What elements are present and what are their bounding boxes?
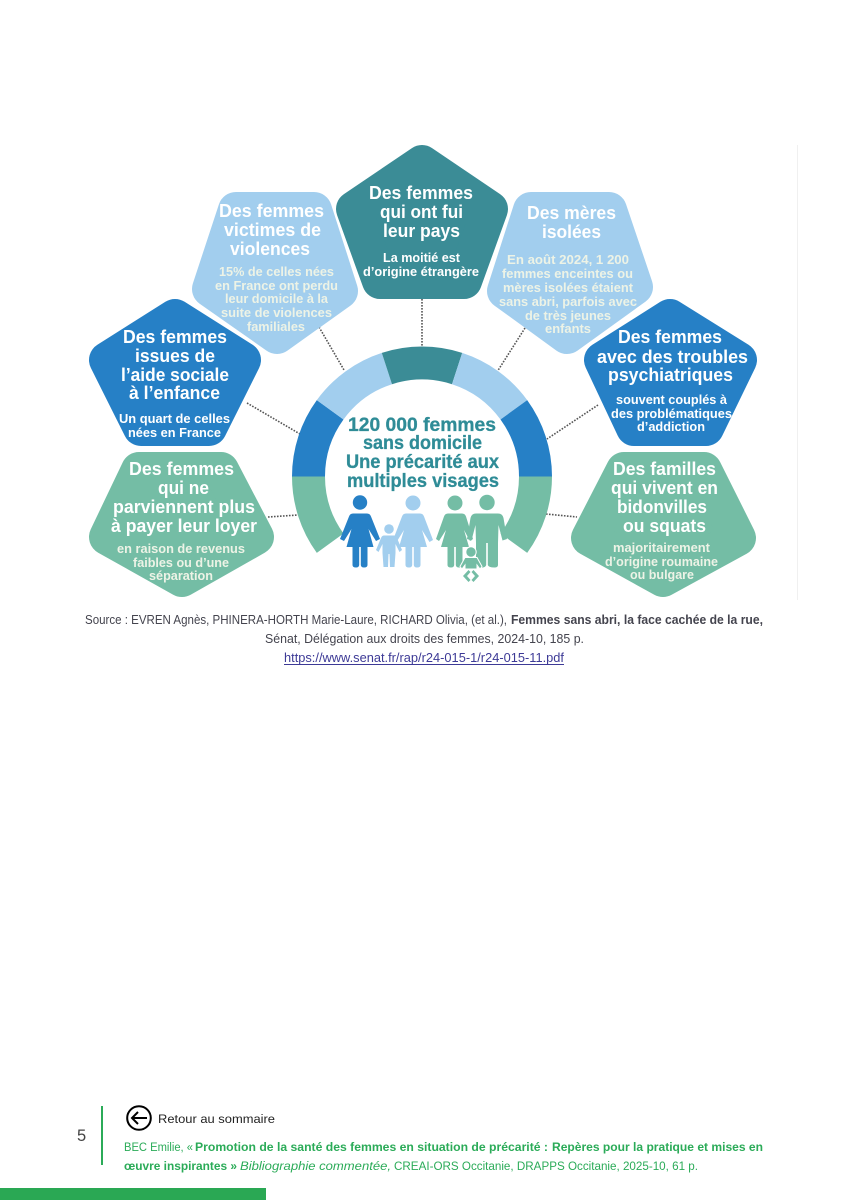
panel: femmes issues de l'aide sociale à l'enfance: Des femmes <box>123 326 227 347</box>
panel: mères isolées: femmes enceintes ou <box>502 266 633 281</box>
icon: light blue woman <box>393 496 433 568</box>
panel: mères isolées: Des mères <box>527 202 616 223</box>
panel: femmes victimes de violences: familiales <box>247 319 305 334</box>
panel: femmes qui ne parviennent plus à payer leur loyer: Des femmes <box>129 458 234 479</box>
panel: femmes victimes de violences: 15% de celles nées <box>219 264 334 279</box>
panel: femmes qui ne parviennent plus à payer leur loyer: qui ne <box>158 477 209 498</box>
icon: green man <box>467 495 507 568</box>
panel: femmes victimes de violences: en France ont perdu <box>215 278 338 293</box>
panel: femmes qui ne parviennent plus à payer leur loyer: parviennent plus <box>113 496 255 517</box>
panel: femmes avec des troubles psychiatriques: psychiatriques <box>608 364 733 385</box>
panel: familles en bidonvilles ou squats: majoritairement <box>613 540 711 555</box>
panel: femmes issues de l'aide sociale à l'enfance <box>107 317 243 440</box>
panel: femmes issues de l'aide sociale à l'enfance: l’aide sociale <box>121 364 229 385</box>
footer citation: Bibliographie commentée, <box>240 1159 391 1173</box>
icon: green woman <box>436 496 473 568</box>
panel: femmes victimes de violences: Des femmes <box>219 200 324 221</box>
panel: femmes qui ont fui leur pays <box>354 163 490 281</box>
footer citation: CREAI-ORS Occitanie, DRAPPS Occitanie, 2025-10, 61 p. <box>394 1159 698 1173</box>
panel: mères isolées <box>499 202 637 336</box>
footer citation: Repères pour la pratique et mises en <box>552 1140 763 1154</box>
central title: multiples visages <box>347 470 499 492</box>
panel: femmes issues de l'aide sociale à l'enfance: issues de <box>135 345 215 366</box>
panel: femmes avec des troubles psychiatriques <box>597 317 748 434</box>
footer green bar <box>0 1188 266 1200</box>
panel: femmes qui ne parviennent plus à payer leur loyer: en raison de revenus <box>117 541 245 556</box>
central title: sans domicile <box>363 432 482 454</box>
back to contents link: Retour au sommaire <box>158 1112 275 1126</box>
panel: femmes avec des troubles psychiatriques: des problématiques <box>611 406 732 421</box>
icon: blue woman <box>340 495 380 568</box>
panel: mères isolées: enfants <box>545 321 591 336</box>
panel: familles en bidonvilles ou squats: d’origine roumaine <box>605 554 718 569</box>
panel: familles en bidonvilles ou squats: Des familles <box>613 458 716 479</box>
panel: femmes victimes de violences: leur domicile à la <box>225 291 329 306</box>
icon: back arrow <box>127 1106 151 1130</box>
panel: familles en bidonvilles ou squats: bidonvilles <box>617 496 707 517</box>
panel: mères isolées: de très jeunes <box>525 308 611 323</box>
panel: femmes qui ont fui leur pays: d’origine étrangère <box>363 264 479 279</box>
icon: green baby <box>460 547 482 582</box>
panel: femmes avec des troubles psychiatriques: Des femmes <box>618 326 722 347</box>
panel: mères isolées: isolées <box>542 221 601 242</box>
dotted connector lines <box>247 299 598 517</box>
central segmented ring <box>292 347 552 553</box>
panel: femmes avec des troubles psychiatriques: souvent couplés à <box>616 392 728 407</box>
panel: mères isolées: sans abri, parfois avec <box>499 294 637 309</box>
central title <box>346 414 499 492</box>
central title: Une précarité aux <box>346 451 499 473</box>
footer citation: BEC Emilie, « <box>124 1140 193 1154</box>
panel: femmes qui ont fui leur pays: leur pays <box>383 220 460 241</box>
panel: familles en bidonvilles ou squats: ou bulgare <box>630 567 694 582</box>
source citation <box>85 613 763 665</box>
source citation: Source : EVREN Agnès, PHINERA-HORTH Marie-Laure, RICHARD Olivia, (et al.), <box>85 613 507 627</box>
page number: 5 <box>77 1127 86 1145</box>
panel: femmes qui ont fui leur pays: qui ont fui <box>380 201 463 222</box>
panel: femmes victimes de violences: violences <box>230 238 310 259</box>
icon: family figures <box>340 495 507 582</box>
source citation: Sénat, Délégation aux droits des femmes, 2024-10, 185 p. <box>265 632 584 646</box>
source citation: Femmes sans abri, la face cachée de la rue, <box>511 613 763 627</box>
icon: light blue child <box>376 524 402 567</box>
panel: femmes issues de l'aide sociale à l'enfance: nées en France <box>128 425 221 440</box>
panel: femmes qui ne parviennent plus à payer leur loyer: séparation <box>149 568 213 583</box>
panel: femmes avec des troubles psychiatriques: avec des troubles <box>597 346 748 367</box>
panel: mères isolées: En août 2024, 1 200 <box>507 252 629 267</box>
source citation: https://www.senat.fr/rap/r24-015-1/r24-015-11.pdf <box>284 651 565 665</box>
footer citation <box>124 1140 763 1173</box>
panel: femmes qui ne parviennent plus à payer leur loyer <box>107 458 257 583</box>
panel: femmes victimes de violences: suite de violences <box>221 305 332 320</box>
central title: 120 000 femmes <box>348 414 496 436</box>
panel: femmes qui ne parviennent plus à payer leur loyer: à payer leur loyer <box>111 515 257 536</box>
panel: femmes issues de l'aide sociale à l'enfance: Un quart de celles <box>119 411 230 426</box>
panel: femmes qui ont fui leur pays: Des femmes <box>369 182 473 203</box>
footer citation: Promotion de la santé des femmes en situation de précarité : <box>195 1140 548 1154</box>
panel: femmes victimes de violences: victimes de <box>224 219 321 240</box>
footer citation: œuvre inspirantes » <box>124 1159 237 1173</box>
panel: mères isolées: mères isolées étaient <box>503 280 634 295</box>
panel: femmes avec des troubles psychiatriques: d’addiction <box>637 419 705 434</box>
panel: femmes victimes de violences <box>210 200 340 336</box>
panel: femmes issues de l'aide sociale à l'enfance: à l’enfance <box>129 382 220 403</box>
panel: familles en bidonvilles ou squats: qui vivent en <box>611 477 718 498</box>
panel: familles en bidonvilles ou squats: ou squats <box>623 515 706 536</box>
panel: femmes qui ne parviennent plus à payer leur loyer: faibles ou d’une <box>133 555 229 570</box>
panel: femmes qui ont fui leur pays: La moitié est <box>383 250 461 265</box>
footer vertical rule <box>101 1106 103 1165</box>
panel: familles en bidonvilles ou squats <box>589 458 738 582</box>
